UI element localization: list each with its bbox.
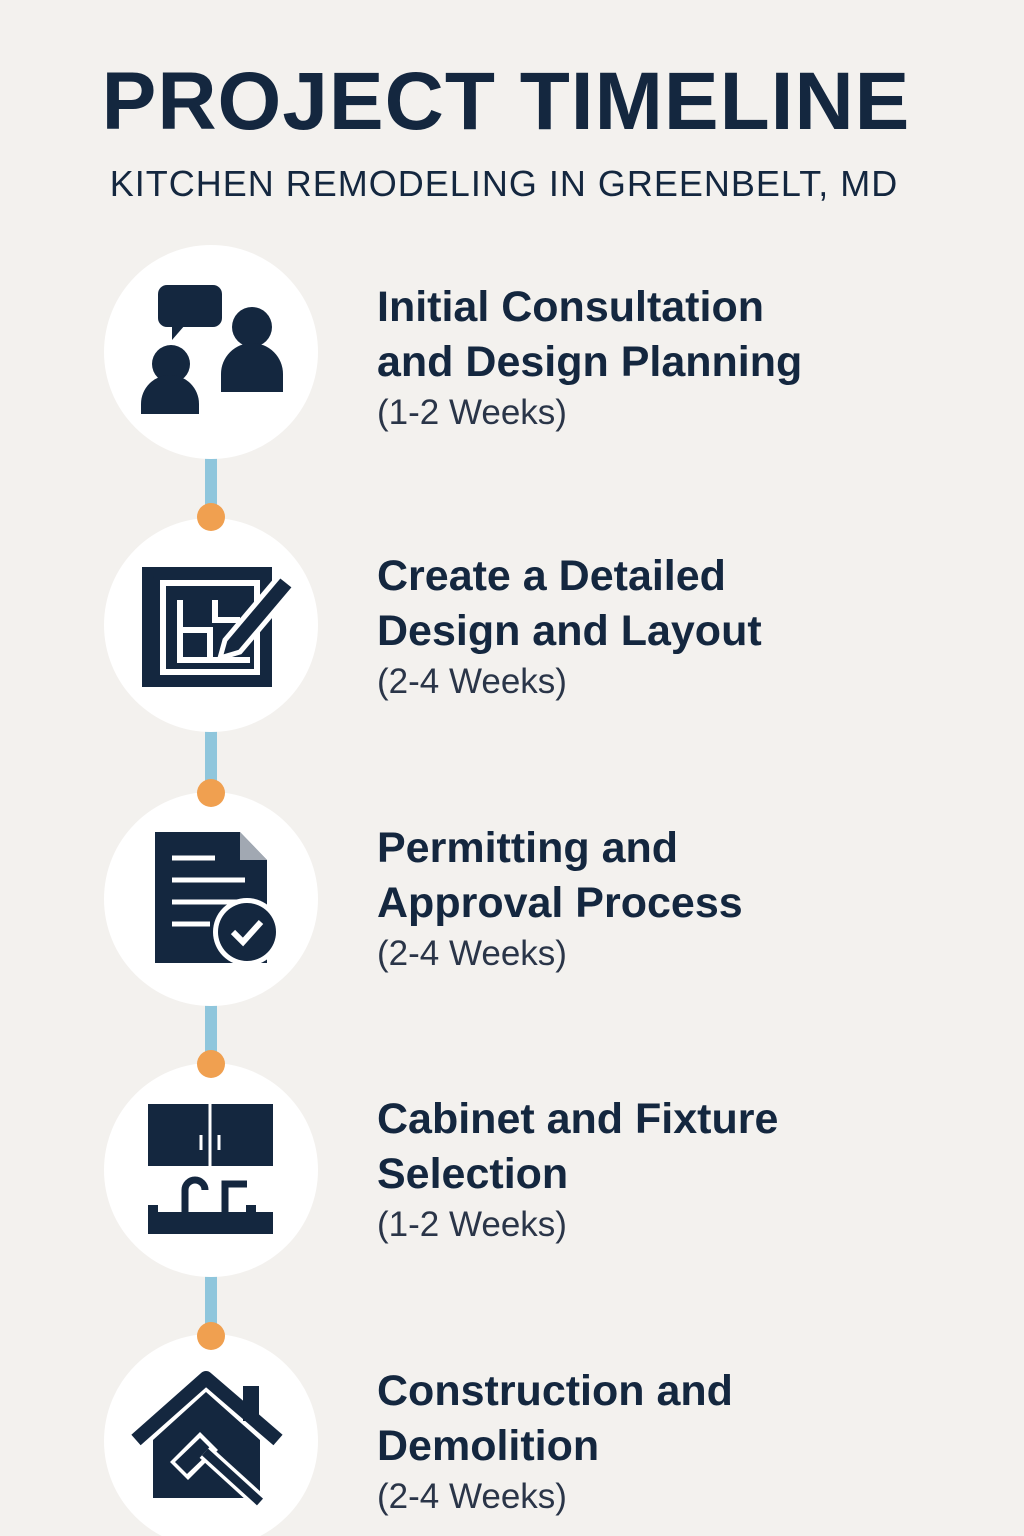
step 2 text: Design and Layout — [377, 607, 762, 655]
icon: cabinets — [148, 1104, 273, 1234]
step 3 text: (2-4 Weeks) — [377, 934, 567, 973]
step 3 text: Approval Process — [377, 879, 743, 927]
title: PROJECT TIMELINE — [102, 56, 910, 147]
icon: permit document — [155, 832, 281, 966]
step 3 text — [377, 824, 743, 973]
step 3 text: Permitting and — [377, 824, 678, 872]
step 4 text — [377, 1095, 778, 1244]
step 5 text: (2-4 Weeks) — [377, 1477, 567, 1516]
icon: blueprint — [142, 567, 295, 687]
step 2 text: Create a Detailed — [377, 552, 726, 600]
icon: construction — [136, 1378, 278, 1502]
step 2 text: (2-4 Weeks) — [377, 662, 567, 701]
step 5 text — [377, 1367, 733, 1516]
subtitle: KITCHEN REMODELING IN GREENBELT, MD — [110, 163, 898, 204]
step 1 text: Initial Consultation — [377, 283, 764, 331]
connectors — [205, 455, 217, 1342]
step 4 text: (1-2 Weeks) — [377, 1205, 567, 1244]
icon: consultation — [141, 285, 283, 414]
circles — [104, 245, 318, 1536]
step 1 text: and Design Planning — [377, 338, 802, 386]
orange dots — [197, 503, 225, 1350]
step 5 text: Construction and — [377, 1367, 733, 1415]
step 5 text: Demolition — [377, 1422, 599, 1470]
step 4 text: Selection — [377, 1150, 568, 1198]
step 1 text: (1-2 Weeks) — [377, 393, 567, 432]
step 4 text: Cabinet and Fixture — [377, 1095, 778, 1143]
step 2 text — [377, 552, 762, 701]
step 1 text — [377, 283, 802, 432]
